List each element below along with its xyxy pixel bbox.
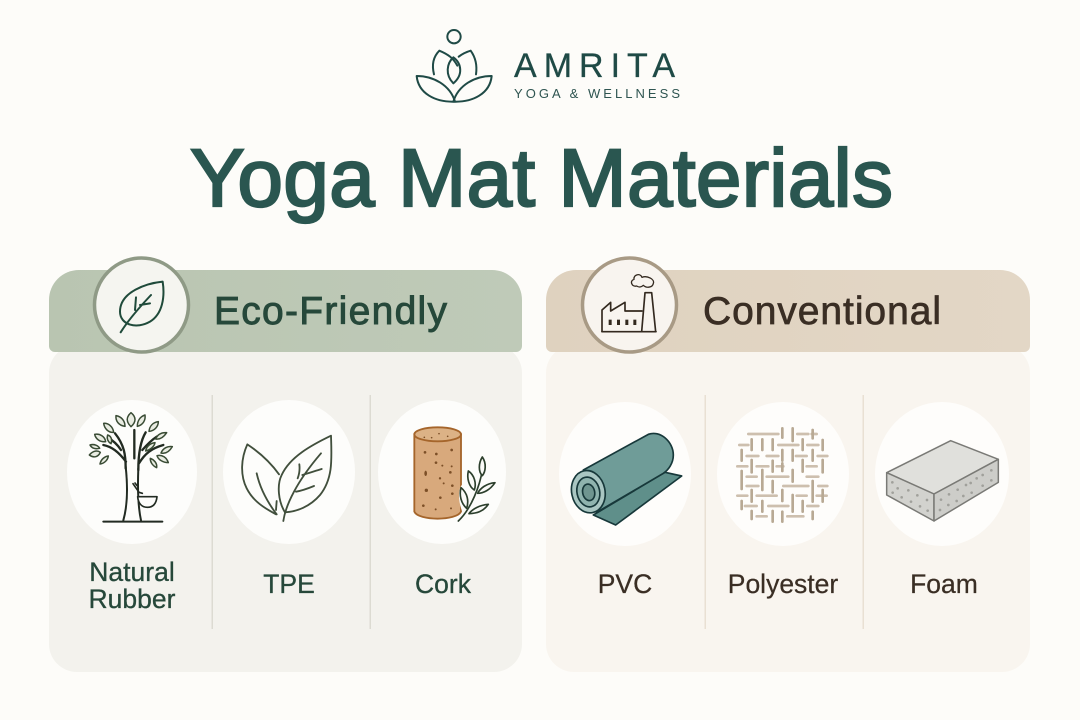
label: PVC — [598, 569, 652, 599]
item: polyester — [717, 402, 849, 599]
brand name: AMRITA — [514, 47, 675, 85]
heading: Conventional: Conventional — [703, 290, 941, 333]
panel body — [546, 345, 1030, 672]
label: Cork — [415, 569, 472, 599]
panel header — [49, 270, 522, 352]
item: natural rubber — [67, 400, 197, 614]
item: natural rubber: Rubber — [89, 584, 176, 614]
icon: rolled mat — [568, 433, 682, 525]
label: TPE — [263, 569, 315, 599]
panel: conventional — [546, 258, 1030, 672]
heading: Eco-Friendly: Eco-Friendly — [214, 290, 448, 333]
logo: Amrita — [417, 30, 680, 102]
item: cork — [378, 400, 506, 599]
icon: foam block — [887, 441, 998, 521]
item: PVC — [559, 402, 691, 599]
icon: cork and sprig — [414, 427, 495, 521]
label: Polyester — [728, 569, 838, 599]
icon: two leaves — [242, 436, 331, 521]
icon: rubber tree — [89, 413, 172, 522]
label: Foam — [910, 569, 978, 599]
panel body — [49, 345, 522, 672]
panel header — [546, 270, 1030, 352]
item: TPE — [223, 400, 355, 599]
icon: lotus — [417, 30, 492, 102]
icon: woven fabric — [737, 428, 827, 522]
brand tagline: YOGA & WELLNESS — [514, 86, 680, 101]
icon: factory badge — [582, 258, 676, 352]
item: foam — [875, 402, 1009, 599]
label: Natural — [89, 557, 175, 587]
title: Yoga Mat Materials — [190, 133, 893, 224]
icon: leaf badge — [94, 258, 188, 352]
panel: eco-friendly — [49, 258, 522, 672]
